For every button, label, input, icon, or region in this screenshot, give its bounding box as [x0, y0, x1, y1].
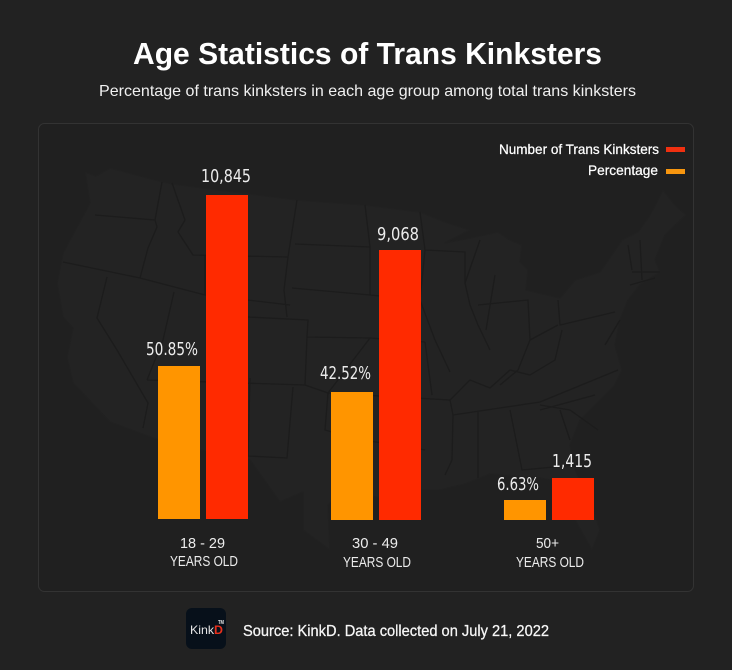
- panel: chart background: [38, 124, 694, 592]
- legend label: number of trans kinksters: Number of Trans Kinksters: [499, 141, 659, 157]
- legend label: percentage: Percentage: [588, 162, 658, 178]
- value label: 42.52%: 42.52%: [320, 363, 371, 384]
- bar: percentage 42.52: [331, 392, 373, 520]
- icon: KinkD logo: [186, 608, 226, 649]
- value label: 50.85%: 50.85%: [146, 339, 198, 360]
- icon: KinkD logo: TM: [218, 620, 224, 626]
- source note: Source: KinkD. Data collected on July 21, 2022: [243, 623, 549, 640]
- legend swatch: orange: [666, 169, 685, 174]
- bar: number 1,415: [552, 478, 594, 520]
- value label: 10,845: 10,845: [201, 166, 251, 187]
- axis label: 30 - 49 years old: 30 - 49: [352, 535, 398, 552]
- value label: 6.63%: 6.63%: [497, 474, 539, 495]
- background map of the United States: [57, 168, 686, 550]
- axis label: 18 - 29 years old: 18 - 29: [180, 535, 225, 552]
- axis label: 50+ years old: 50+: [536, 535, 559, 552]
- axis label: 18 - 29 years old: YEARS OLD: [170, 553, 238, 570]
- bar group: 18 to 29 years old: [146, 166, 251, 570]
- legend: [499, 141, 685, 178]
- bar: number 10,845: [206, 195, 248, 519]
- bar: percentage 6.63: [504, 500, 546, 520]
- western state borders: [63, 182, 425, 458]
- bar group: 30 to 49 years old: [320, 224, 421, 571]
- icon: KinkD logo: KinkD: [190, 623, 223, 637]
- eastern state borders: [445, 240, 660, 478]
- axis label: 18 - 29 years old: [170, 535, 238, 570]
- subtitle: Percentage of trans kinksters in each age group among total trans kinksters: [99, 83, 636, 100]
- bar: number 9,068: [379, 250, 421, 520]
- legend swatch: red: [666, 147, 685, 152]
- central state borders: [325, 205, 530, 450]
- value label: 9,068: 9,068: [377, 224, 419, 245]
- bar group: 50 plus years old: [497, 451, 594, 571]
- axis label: 50+ years old: [516, 535, 584, 571]
- value label: 1,415: 1,415: [552, 451, 592, 472]
- bar: percentage 50.85: [158, 366, 200, 519]
- axis label: 30 - 49 years old: YEARS OLD: [343, 554, 411, 571]
- axis label: 50+ years old: YEARS OLD: [516, 554, 584, 571]
- title: Age Statistics of Trans Kinksters: [133, 36, 602, 71]
- axis label: 30 - 49 years old: [343, 535, 411, 571]
